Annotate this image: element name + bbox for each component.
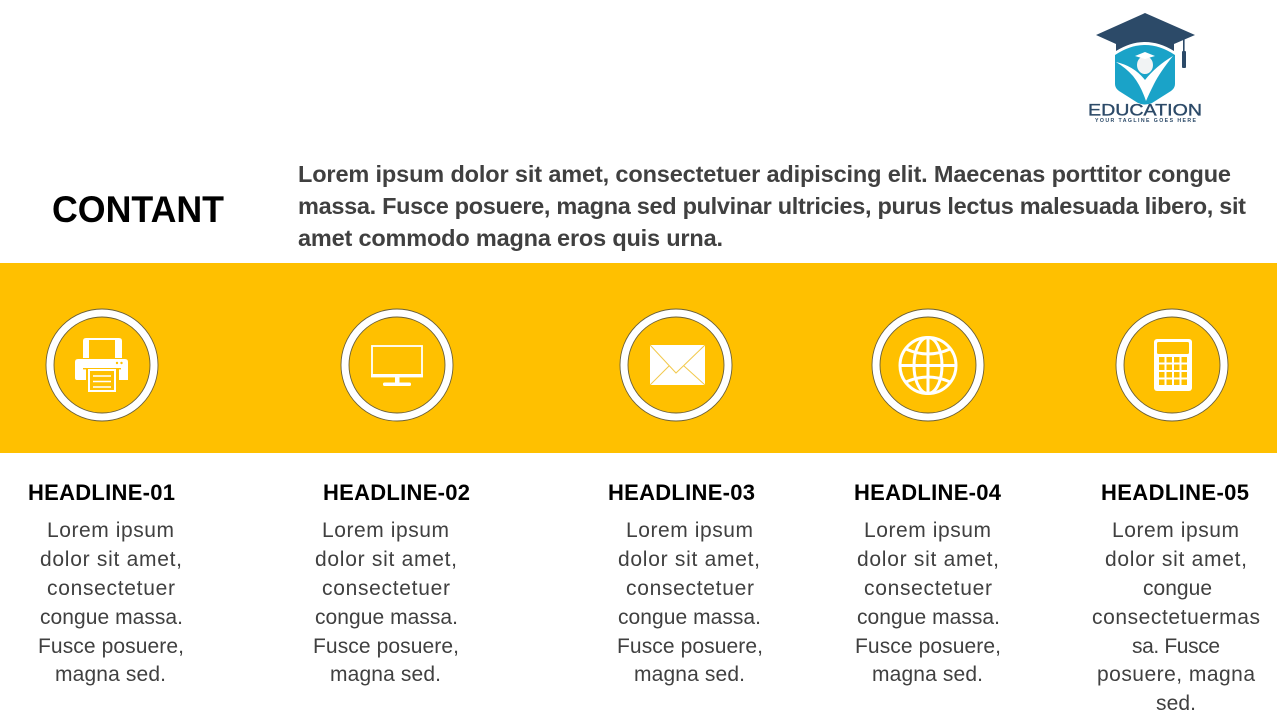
icon: envelope: [620, 309, 732, 421]
headline 4: HEADLINE-04: [854, 480, 1002, 505]
icon: calculator: [1116, 309, 1228, 421]
icon: globe: [872, 309, 984, 421]
body text 2: magna sed.: [330, 663, 441, 686]
body text 1: Lorem ipsum: [47, 519, 174, 542]
body text 1: [38, 519, 184, 686]
intro text block: amet commodo magna eros quis urna.: [298, 225, 723, 251]
body text 2: [313, 519, 459, 686]
body text 1: Fusce posuere,: [38, 635, 184, 658]
headline 5: HEADLINE-05: [1101, 480, 1249, 505]
intro text block: massa. Fusce posuere, magna sed pulvinar ultricies, purus lectus malesuada libero, sit: [298, 193, 1246, 219]
body text 2: dolor sit amet,: [315, 548, 457, 571]
body text 2: Fusce posuere,: [313, 635, 459, 658]
body text 1: magna sed.: [55, 663, 166, 686]
body text 5: sa. Fusce: [1132, 635, 1220, 658]
body text 2: consectetuer: [322, 577, 450, 600]
body text 3: [617, 519, 763, 686]
intro text block: [298, 161, 1246, 251]
body text 3: dolor sit amet,: [618, 548, 760, 571]
body text 3: Fusce posuere,: [617, 635, 763, 658]
column 1: [28, 480, 184, 686]
body text 4: congue massa.: [857, 606, 1000, 629]
body text 3: magna sed.: [634, 663, 745, 686]
body text 4: dolor sit amet,: [857, 548, 999, 571]
column 5: [1092, 480, 1260, 715]
body text 5: dolor sit amet,: [1105, 548, 1247, 571]
body text 4: Fusce posuere,: [855, 635, 1001, 658]
headline 2: HEADLINE-02: [323, 480, 470, 505]
logo: education: YOUR TAGLINE GOES HERE: [1095, 118, 1197, 124]
logo: education: EDUCATION: [1088, 100, 1202, 120]
headline 3: HEADLINE-03: [608, 480, 755, 505]
headline 1: HEADLINE-01: [28, 480, 175, 505]
yellow band: [0, 263, 1277, 453]
body text 4: Lorem ipsum: [864, 519, 991, 542]
body text 5: Lorem ipsum: [1112, 519, 1239, 542]
body text 2: congue massa.: [315, 606, 458, 629]
intro text block: Lorem ipsum dolor sit amet, consectetuer adipiscing elit. Maecenas porttitor congue: [298, 161, 1231, 187]
body text 1: dolor sit amet,: [40, 548, 182, 571]
body text 2: Lorem ipsum: [322, 519, 449, 542]
logo: education: [1088, 13, 1202, 124]
body text 5: congue: [1143, 577, 1212, 600]
icon: monitor: [341, 309, 453, 421]
column 3: [608, 480, 763, 686]
icon: printer: [46, 309, 158, 421]
body text 1: congue massa.: [40, 606, 183, 629]
body text 5: sed.: [1156, 692, 1196, 715]
body text 1: consectetuer: [47, 577, 175, 600]
column 2: [313, 480, 470, 686]
body text 3: congue massa.: [618, 606, 761, 629]
title: CONTANT: [52, 189, 224, 230]
body text 3: Lorem ipsum: [626, 519, 753, 542]
body text 5: consectetuermas: [1092, 606, 1260, 629]
body text 4: consectetuer: [864, 577, 992, 600]
body text 5: [1092, 519, 1260, 715]
body text 4: magna sed.: [872, 663, 983, 686]
body text 5: posuere, magna: [1097, 663, 1255, 686]
body text 3: consectetuer: [626, 577, 754, 600]
column 4: [854, 480, 1002, 686]
body text 4: [855, 519, 1001, 686]
